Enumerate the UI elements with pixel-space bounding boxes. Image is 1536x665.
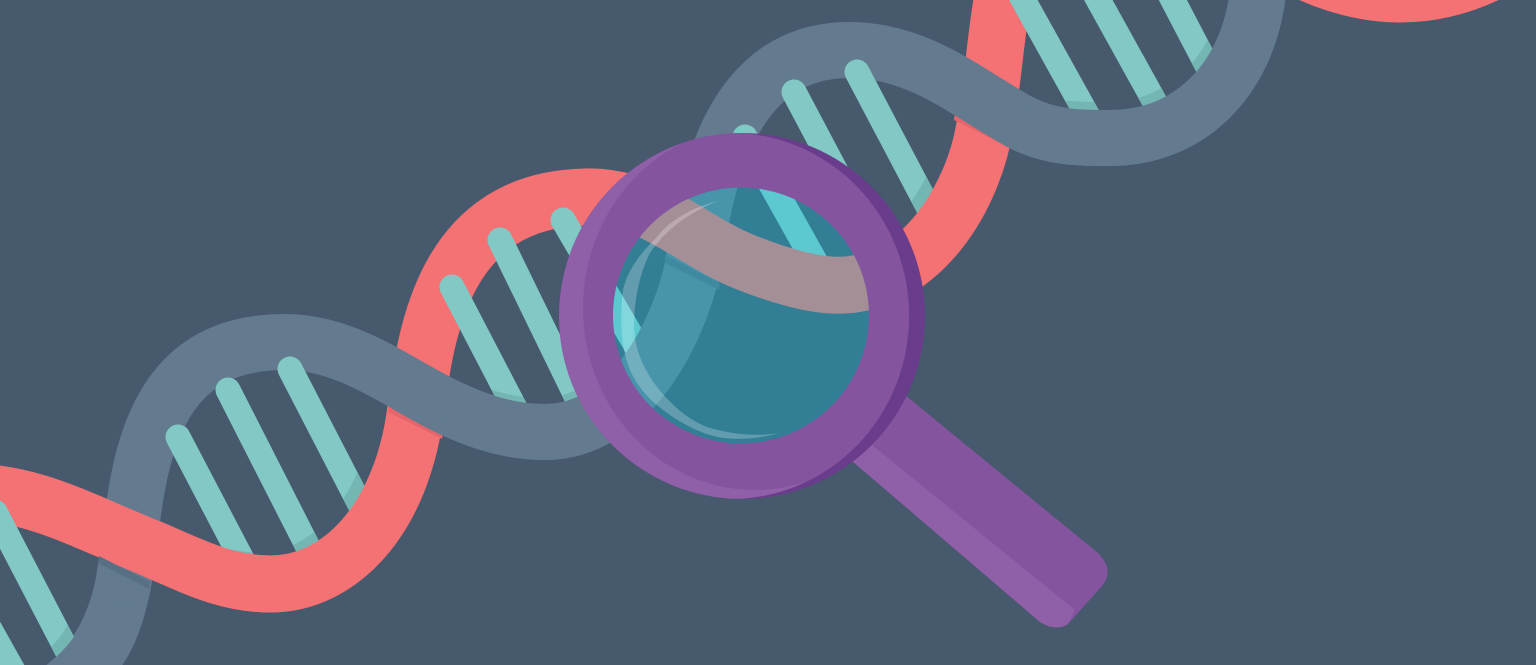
ring [553,126,927,499]
lens highlight [621,201,779,439]
handle [845,395,1108,628]
strand segments covering rung ends [60,0,1262,665]
slate shadow under coral crossing [98,556,150,589]
rung shadows cast by the strands [51,40,1212,656]
strand shadows on coral [388,111,1008,439]
coral strand crossing over slate [0,492,270,584]
magnifying glass [559,133,1108,628]
lens [613,188,869,444]
base-pair rungs [0,0,1212,665]
strand: slate backbone [60,0,1262,665]
